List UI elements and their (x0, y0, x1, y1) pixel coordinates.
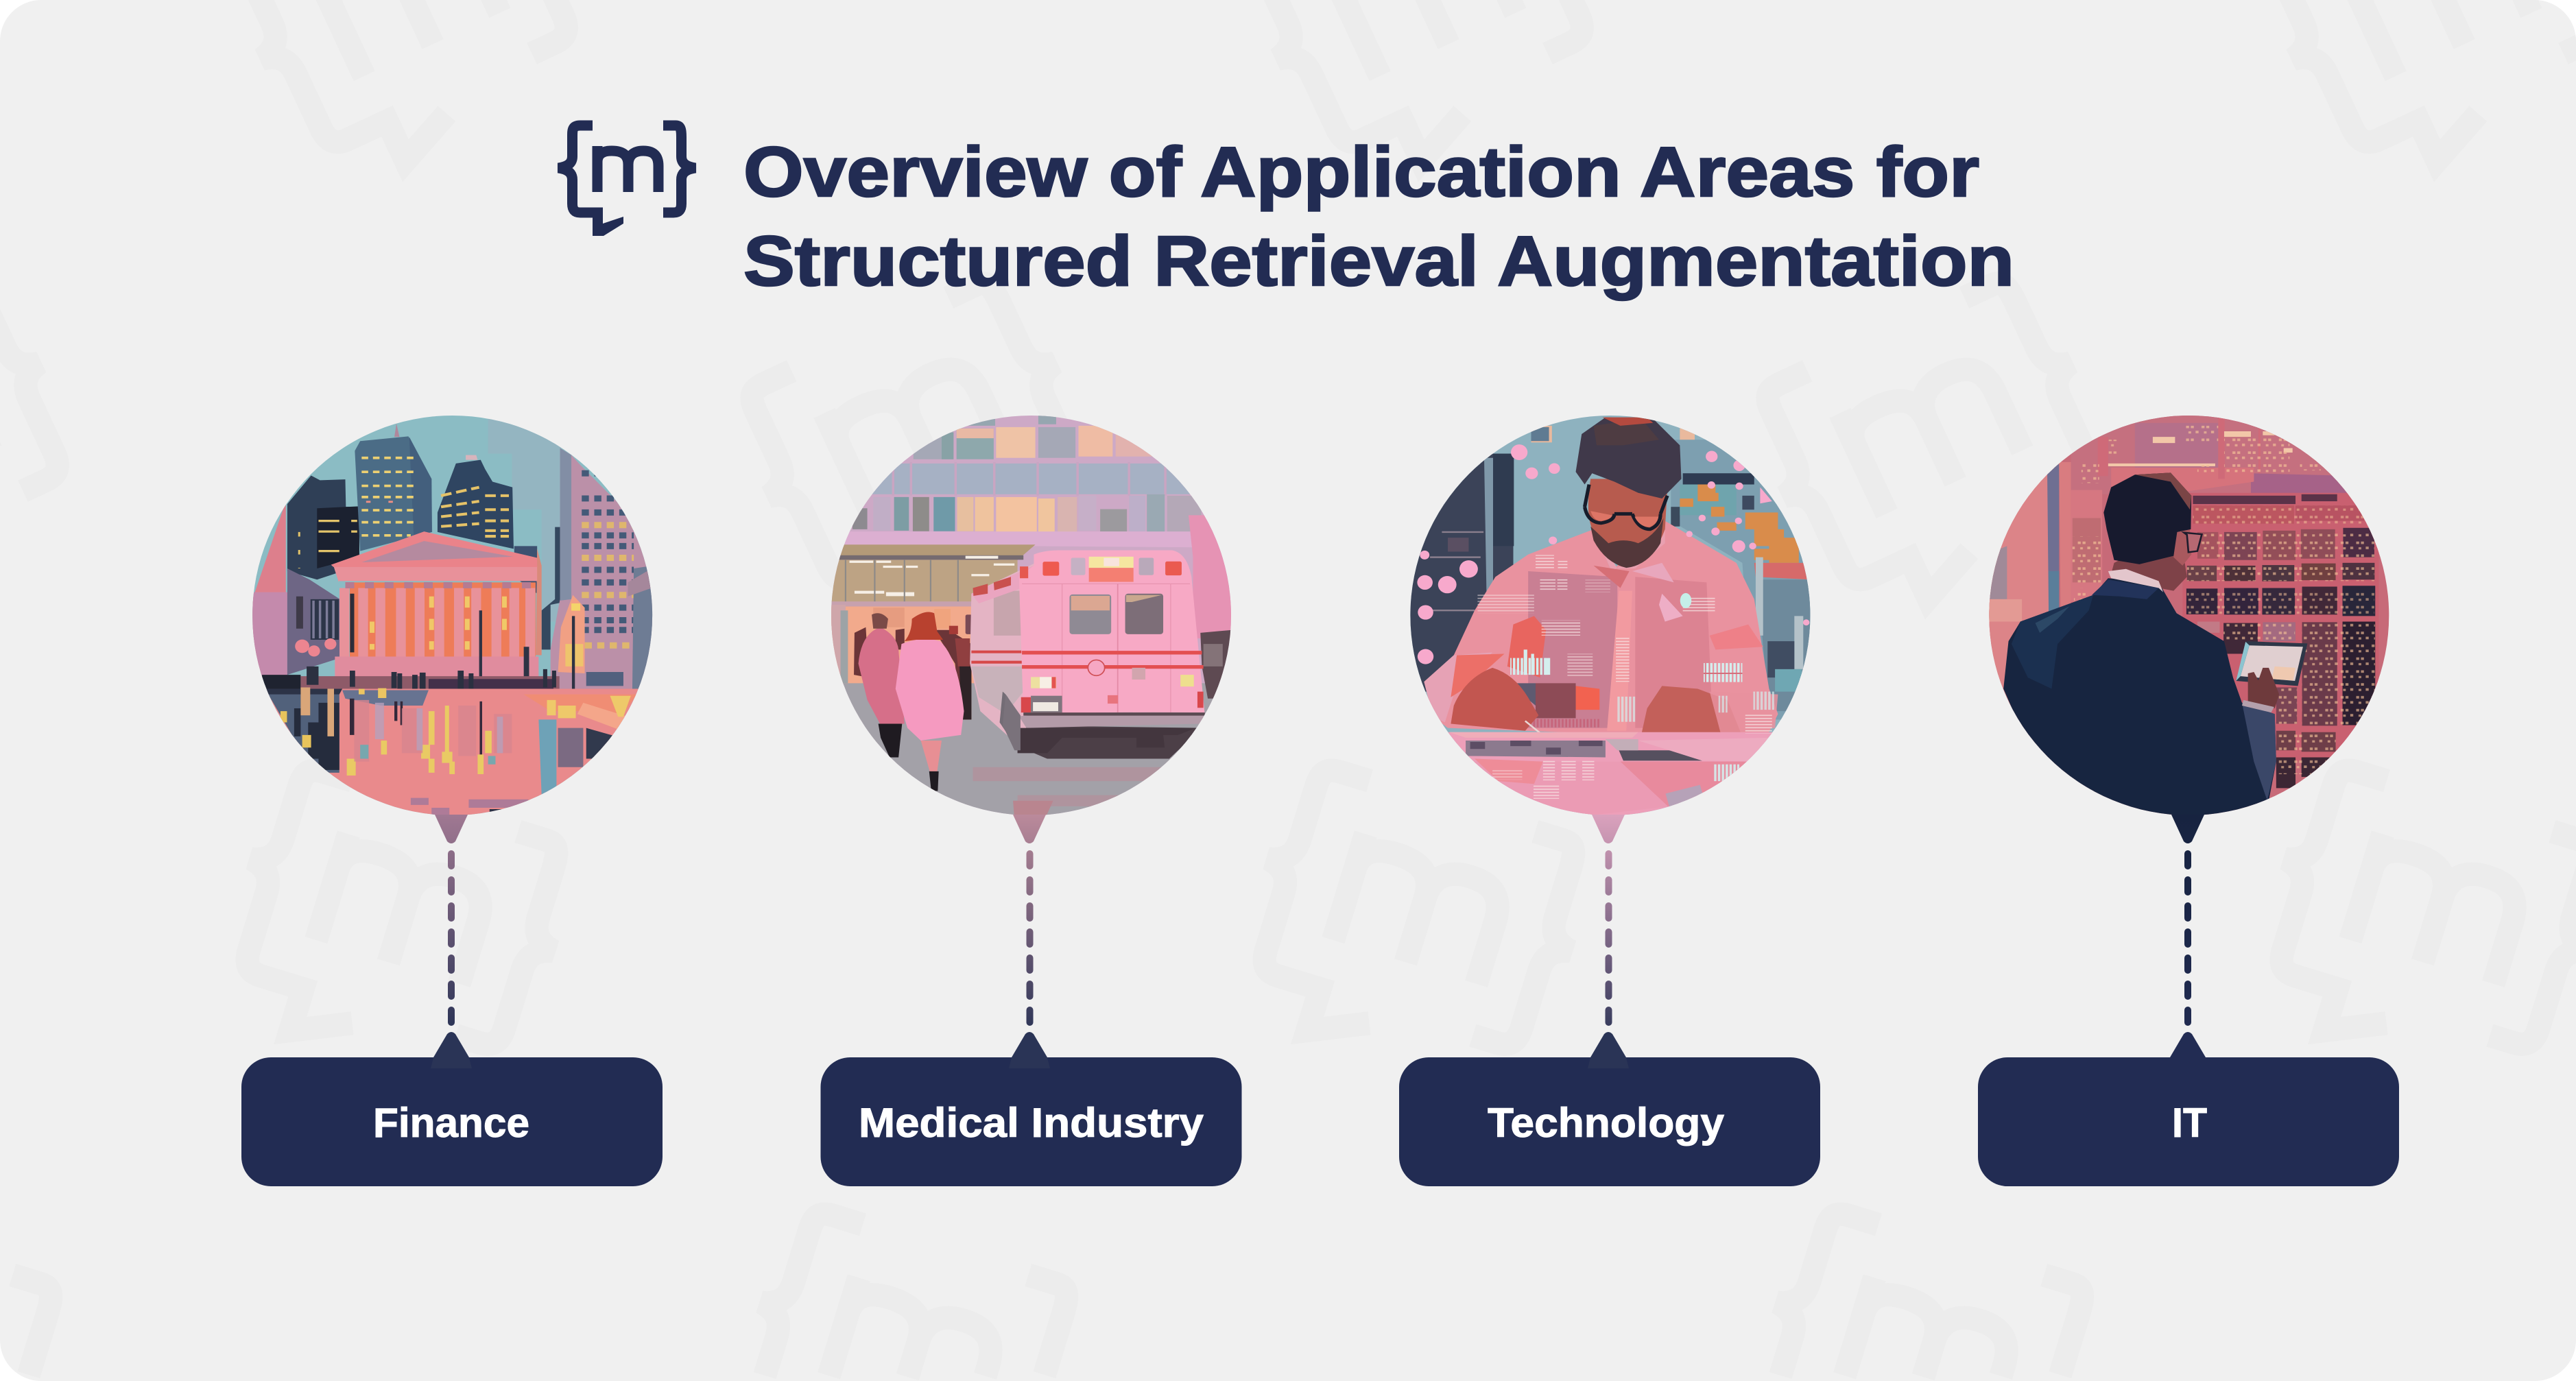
label pill: IT (1978, 1032, 2399, 1186)
column: Medical Industry (820, 409, 1241, 1186)
column: IT (1978, 409, 2399, 1186)
title: Overview of Application Areas for (743, 132, 1979, 211)
column: Finance (241, 409, 667, 1186)
label pill: Medical Industry (820, 1032, 1241, 1186)
connector: pin and dashed line (1013, 815, 1046, 1022)
label pill: Technology (1399, 1032, 1820, 1186)
label pill: Finance (241, 1032, 663, 1186)
brand logo (558, 125, 695, 236)
label pill: IT: IT (2172, 1100, 2207, 1146)
connector: pin and dashed line (435, 815, 468, 1022)
label pill: Technology: Technology (1488, 1100, 1725, 1146)
image: man in glasses working over holographic data (1403, 409, 1820, 823)
image: ambulance outside hospital with people walking (824, 409, 1241, 823)
title: Structured Retrieval Augmentation (743, 221, 2014, 300)
image: neoclassical bank among towers at dusk (244, 409, 667, 823)
label pill: Finance: Finance (373, 1100, 529, 1146)
label pill: Medical Industry: Medical Industry (859, 1100, 1204, 1146)
title (743, 132, 2014, 300)
connector: pin and dashed line (2171, 815, 2204, 1022)
column: Technology (1399, 409, 1820, 1186)
connector: pin and dashed line (1592, 815, 1625, 1022)
image: man in suit with tablet viewing a lit city grid (1980, 409, 2396, 823)
watermark pattern of tilted brand marks (252, 145, 2389, 1186)
